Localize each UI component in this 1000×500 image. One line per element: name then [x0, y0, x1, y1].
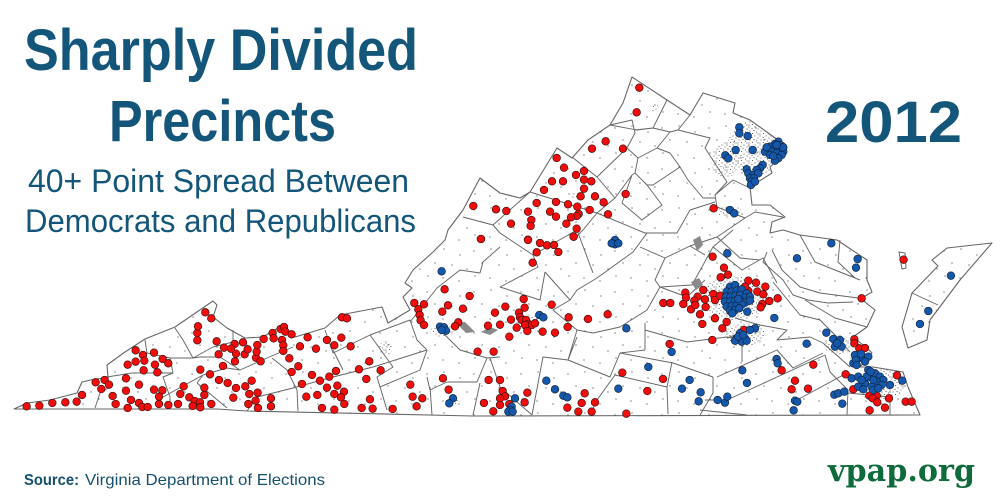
source note: Source: — [24, 472, 79, 489]
map: Virginia precincts — [14, 77, 992, 417]
county boundaries — [95, 100, 938, 415]
red markers: Republican precincts — [23, 84, 915, 417]
title: Sharply Divided — [24, 18, 418, 83]
logo: vpap.org: vpap.org — [827, 453, 975, 489]
title: Precincts — [109, 89, 336, 154]
small precinct points — [14, 77, 992, 416]
source note: Virginia Department of Elections — [85, 472, 325, 489]
blue markers: Democratic precincts — [436, 123, 955, 415]
subtitle — [25, 163, 416, 239]
year label: 2012 — [825, 90, 962, 155]
subtitle: Democrats and Republicans — [25, 203, 416, 239]
gray patches — [456, 236, 703, 335]
title — [24, 18, 418, 154]
state outline — [14, 77, 992, 416]
subtitle: 40+ Point Spread Between — [28, 163, 409, 199]
